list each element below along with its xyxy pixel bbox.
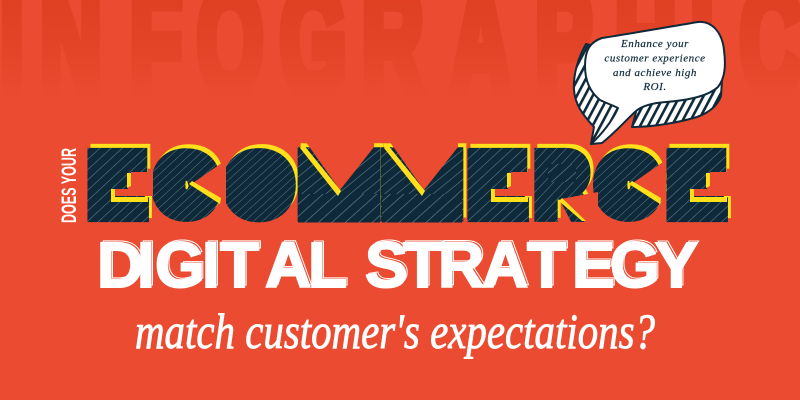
bubble text: customer experience: [604, 52, 706, 64]
hatched navy letter faces: E: [89, 137, 145, 233]
hatched navy letter faces: M: [385, 139, 459, 231]
yellow extrusion layer: R: [539, 134, 591, 229]
side label: DOES YOUR: [58, 148, 81, 223]
headline: ECOMMERCE: [89, 133, 727, 233]
yellow extrusion layer: C: [163, 143, 213, 220]
subheading: DIGITAL STRATEGY: [97, 227, 700, 301]
yellow extrusion layer: M: [305, 135, 379, 227]
white letters: DIGITAL STRATEGY: [97, 229, 698, 301]
yellow extrusion layer: O: [236, 144, 288, 218]
yellow extrusion layer: [92, 133, 727, 229]
offset outline: DIGITAL STRATEGY: [99, 227, 700, 299]
bubble body: [585, 22, 725, 144]
yellow extrusion layer: E: [472, 133, 528, 229]
R fill and notch: [548, 164, 576, 182]
bubble text: and achieve high: [613, 67, 697, 79]
letter notches and M bases: [111, 138, 732, 222]
yellow extrusion layer: C: [605, 143, 655, 220]
yellow extrusion layer: M: [388, 135, 462, 227]
hatched navy letter faces: M: [302, 139, 376, 231]
hatched navy letter faces: C: [160, 147, 210, 224]
E notches: [115, 172, 153, 196]
hatched navy letter faces: [89, 137, 724, 233]
hatched navy letter faces: E: [469, 137, 525, 233]
hatched navy letter faces: E: [668, 137, 724, 233]
tagline: match customer's expectations?: [135, 303, 655, 359]
bubble hatched shadow: [574, 44, 722, 144]
speech bubble: [574, 22, 725, 144]
yellow extrusion layer: E: [671, 133, 727, 229]
bubble text: Enhance your: [620, 38, 689, 50]
hatched navy letter faces: O: [233, 148, 285, 222]
yellow extrusion layer: E: [92, 133, 148, 229]
bubble text: ROI.: [642, 81, 667, 93]
hatched navy letter faces: R: [536, 138, 588, 233]
hatched navy letter faces: C: [602, 147, 652, 224]
